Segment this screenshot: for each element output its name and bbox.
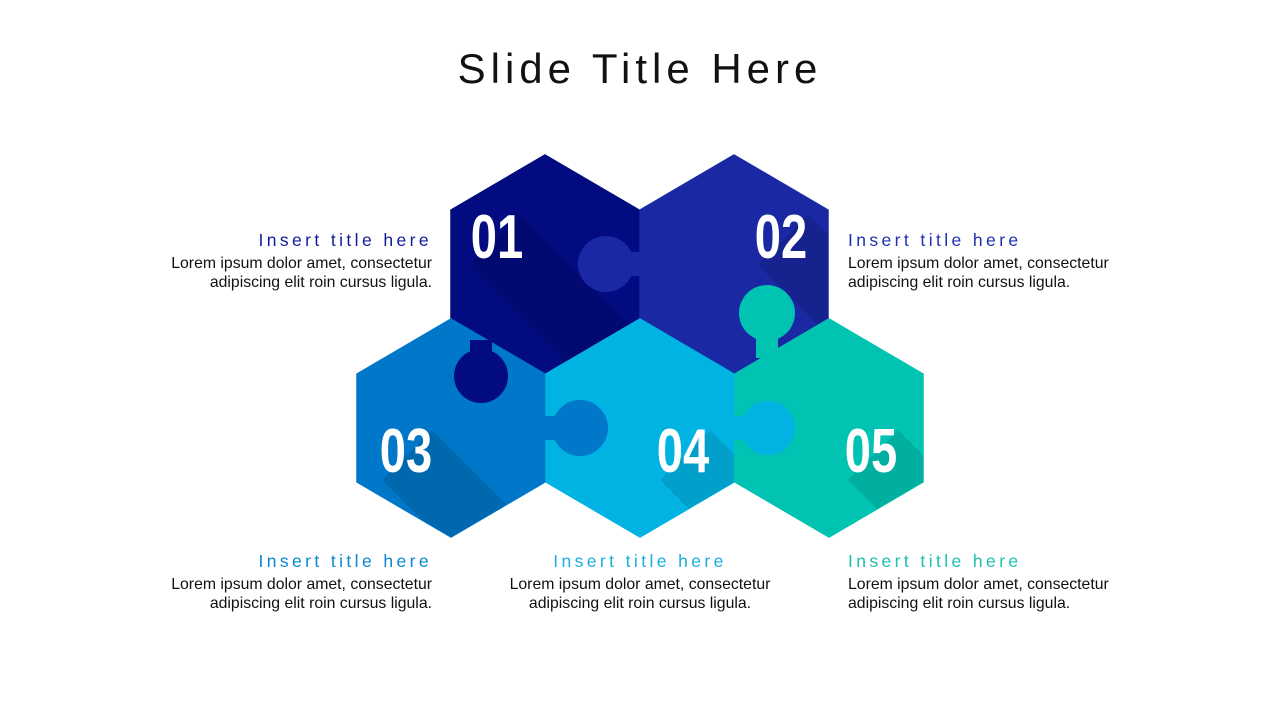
text block 3: Lorem ipsum dolor amet, consectetur — [171, 576, 432, 593]
text block 3: adipiscing elit roin cursus ligula. — [210, 595, 432, 612]
hex 2 — [639, 154, 829, 374]
text block 1 — [171, 230, 432, 291]
text block 4: Lorem ipsum dolor amet, consectetur — [510, 576, 770, 593]
hex 4 — [545, 318, 734, 538]
text block 1: Lorem ipsum dolor amet, consectetur — [171, 255, 432, 272]
knob 3 into 4 — [543, 400, 608, 456]
hex 5 — [734, 318, 924, 538]
text block 3 — [171, 551, 432, 612]
text block 5: Insert title here — [848, 551, 1022, 571]
text block 2: Insert title here — [848, 230, 1022, 250]
text block 2 — [848, 230, 1109, 291]
hex 3 — [356, 318, 546, 538]
knob 5 into 2 — [739, 285, 795, 358]
numbers: 02 — [755, 202, 807, 272]
text block 5 — [848, 551, 1109, 612]
text block 2: Lorem ipsum dolor amet, consectetur — [848, 255, 1109, 272]
numbers: 04 — [657, 416, 710, 486]
numbers: 05 — [845, 416, 897, 486]
knob 2 into 1 — [578, 236, 642, 292]
text block 4 — [510, 551, 770, 612]
text block 2: adipiscing elit roin cursus ligula. — [848, 274, 1070, 291]
text block 4: adipiscing elit roin cursus ligula. — [529, 595, 751, 612]
numbers: 01 — [471, 202, 523, 272]
text block 1: Insert title here — [258, 230, 432, 250]
knob 4 into 5 — [732, 401, 795, 455]
numbers — [380, 202, 897, 486]
title: Slide Title Here — [458, 45, 822, 92]
text block 3: Insert title here — [258, 551, 432, 571]
text block 1: adipiscing elit roin cursus ligula. — [210, 274, 432, 291]
text block 4: Insert title here — [553, 551, 727, 571]
knob 1 into 3 — [454, 340, 508, 403]
numbers: 03 — [380, 416, 432, 486]
text block 5: Lorem ipsum dolor amet, consectetur — [848, 576, 1109, 593]
puzzle hexagon diagram — [356, 154, 924, 538]
text block 5: adipiscing elit roin cursus ligula. — [848, 595, 1070, 612]
hex 1 — [450, 154, 640, 374]
